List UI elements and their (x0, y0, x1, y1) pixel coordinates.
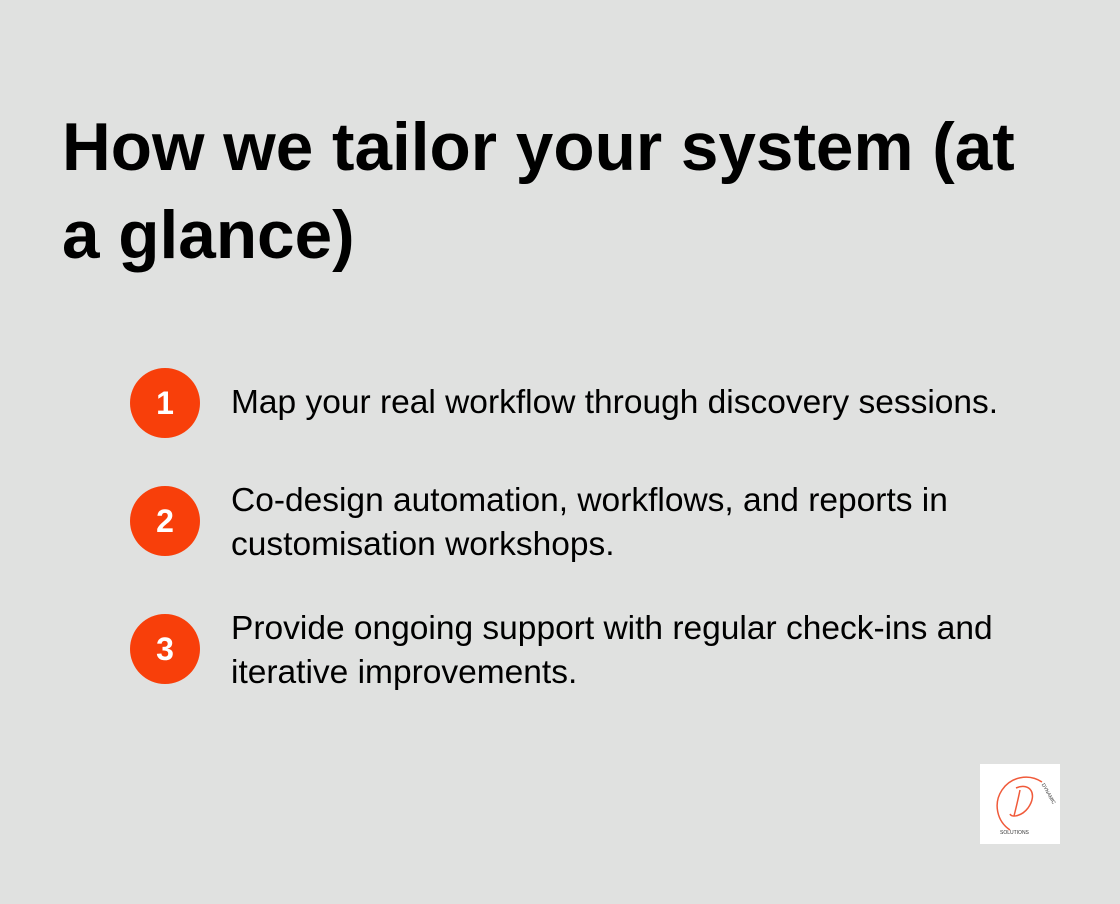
step 1 (130, 368, 998, 438)
step 1 text: Map your real workflow through discovery sessions. (231, 384, 998, 421)
step 2 text: customisation workshops. (231, 526, 615, 563)
step 3 (130, 610, 993, 691)
logo (980, 764, 1060, 844)
logo: SOLUTIONS (1000, 830, 1030, 836)
number badge 1 (130, 368, 200, 438)
step 3 text (231, 610, 993, 691)
number badge 2: 2 (156, 503, 174, 539)
title (62, 110, 1015, 273)
number badge 1: 1 (156, 385, 174, 421)
title: a glance) (62, 198, 355, 273)
step 2 text (231, 482, 948, 563)
step 2 (130, 482, 948, 563)
step 2 text: Co-design automation, workflows, and reports in (231, 482, 948, 519)
number badge 2 (130, 486, 200, 556)
step 3 text: iterative improvements. (231, 654, 577, 691)
number badge 3 (130, 614, 200, 684)
title: How we tailor your system (at (62, 110, 1015, 185)
logo: DYNAMIC (1040, 783, 1057, 806)
number badge 3: 3 (156, 631, 174, 667)
step 3 text: Provide ongoing support with regular check-ins and (231, 610, 993, 647)
